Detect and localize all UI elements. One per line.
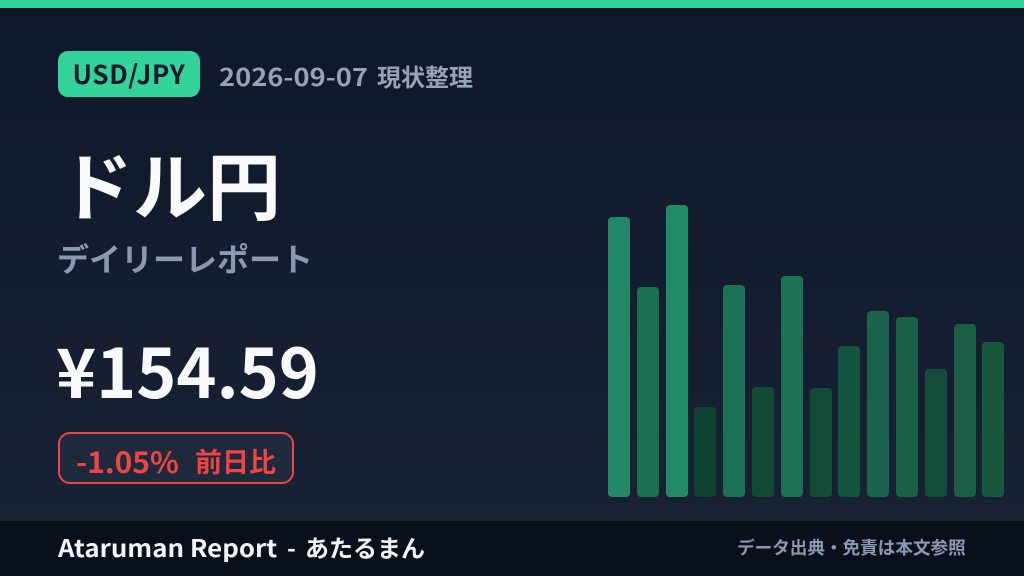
- footer brand: Ataruman Report: [58, 529, 277, 564]
- footer band: [0, 521, 1024, 576]
- subtitle: デイリーレポート: [57, 235, 313, 281]
- change caption: 前日比: [195, 441, 276, 480]
- date label: 2026-09-07: [219, 58, 368, 93]
- badge: USD/JPY: USD/JPY: [72, 55, 185, 92]
- price: ¥154.59: [56, 319, 319, 418]
- footer disclaimer: データ出典・免責は本文参照: [737, 535, 966, 560]
- footer brand: [58, 529, 425, 564]
- date label: 現状整理: [377, 58, 473, 93]
- title: ドル円: [59, 129, 281, 236]
- top accent bar: [0, 0, 1024, 8]
- footer brand: あたるまん: [305, 529, 425, 564]
- footer brand: -: [287, 529, 296, 564]
- date label: [219, 58, 473, 93]
- change value: -1.05%: [76, 440, 179, 482]
- badge: USD/JPY: [58, 51, 200, 97]
- change badge: [58, 432, 294, 484]
